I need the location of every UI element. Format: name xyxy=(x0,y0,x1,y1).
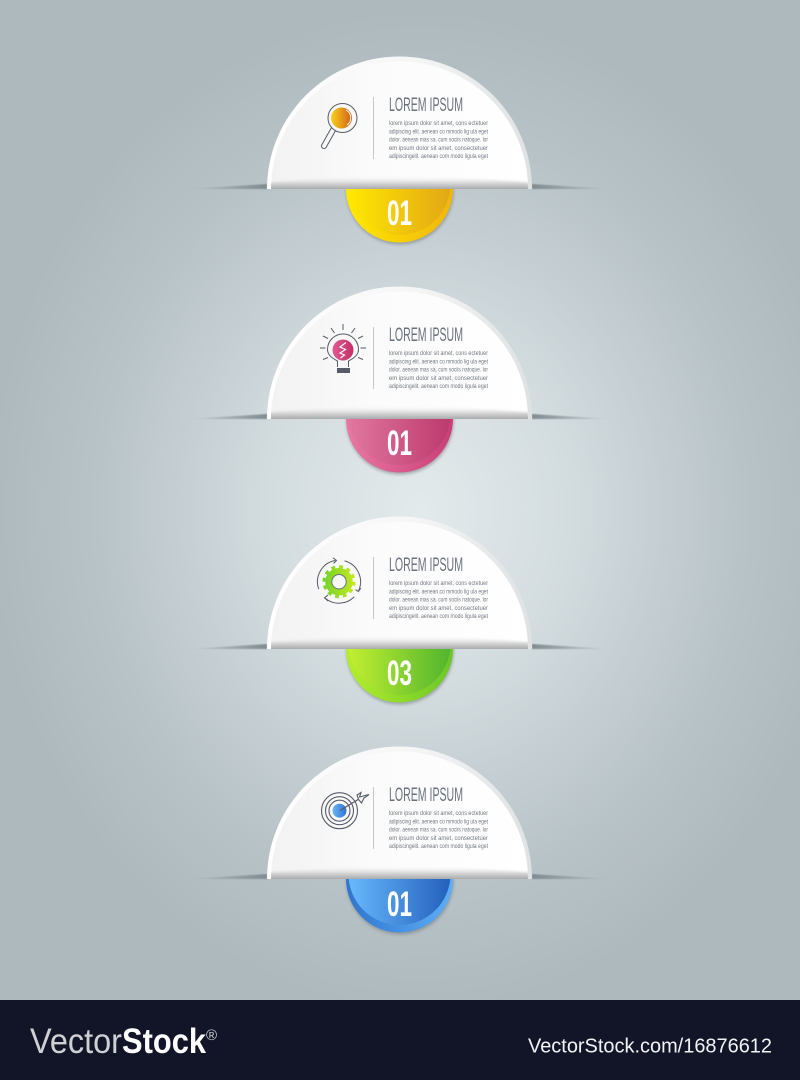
text block xyxy=(389,350,489,390)
semicircle card xyxy=(262,286,537,422)
number badge: 01 xyxy=(345,419,455,476)
text block xyxy=(389,810,489,850)
text block: adipiscingelit. aenean com modo ligula eget xyxy=(389,153,488,160)
icon: light bulb xyxy=(320,324,366,373)
logo: ® xyxy=(206,1027,217,1044)
icon: target with arrow xyxy=(322,792,369,829)
panel: step 1 xyxy=(188,56,610,244)
text block: lorem ipsum dolor sit amet, cons ectetuer xyxy=(389,120,489,127)
logo: Stock xyxy=(122,1022,206,1061)
panel: step 4 xyxy=(188,746,610,934)
text block: dolor. aenean mas sa. cum sociis natoque. lor xyxy=(389,827,489,834)
text block: em ipsum dolor sit amet, consectetuer xyxy=(389,375,489,382)
number badge: 01 xyxy=(345,189,455,246)
divider xyxy=(373,557,374,619)
text block: em ipsum dolor sit amet, consectetuer xyxy=(389,145,489,152)
semicircle card xyxy=(262,56,537,192)
slit shadow xyxy=(188,184,610,189)
text block: lorem ipsum dolor sit amet, cons ectetuer xyxy=(389,350,489,357)
heading: LOREM IPSUM xyxy=(389,95,463,116)
text block: dolor. aenean mas sa. cum sociis natoque. lor xyxy=(389,137,489,144)
slit shadow xyxy=(188,414,610,419)
footer bar xyxy=(0,1000,800,1080)
panel: step 3 xyxy=(188,516,610,704)
slit shadow xyxy=(188,644,610,649)
number badge: 01 xyxy=(345,879,455,936)
number badge: 01: 01 xyxy=(387,424,412,463)
text block: adipiscingelit. aenean com modo ligula eget xyxy=(389,383,488,390)
semicircle card xyxy=(262,746,537,882)
heading: LOREM IPSUM xyxy=(389,785,463,806)
text block: adipiscing elit. aenean co mmodo lig ula eget xyxy=(389,588,488,595)
text block: em ipsum dolor sit amet, consectetuer xyxy=(389,605,489,612)
text block: adipiscing elit. aenean co mmodo lig ula eget xyxy=(389,358,488,365)
heading: LOREM IPSUM xyxy=(389,555,463,576)
text block: em ipsum dolor sit amet, consectetuer xyxy=(389,835,489,842)
text block: lorem ipsum dolor sit amet, cons ectetuer xyxy=(389,810,489,817)
icon: gear with cycle arrows xyxy=(317,558,361,603)
text block: lorem ipsum dolor sit amet, cons ectetuer xyxy=(389,580,489,587)
number badge: 03: 03 xyxy=(387,654,412,693)
text block: dolor. aenean mas sa. cum sociis natoque. lor xyxy=(389,597,489,604)
number badge: 01: 01 xyxy=(387,885,412,924)
text block: adipiscing elit. aenean co mmodo lig ula eget xyxy=(389,128,488,135)
icon: magnifier xyxy=(324,104,357,146)
text block: adipiscing elit. aenean co mmodo lig ula eget xyxy=(389,818,488,825)
number badge: 01: 01 xyxy=(387,194,412,233)
text block: dolor. aenean mas sa. cum sociis natoque. lor xyxy=(389,367,489,374)
semicircle card xyxy=(262,516,537,652)
heading: LOREM IPSUM xyxy=(389,325,463,346)
text block: adipiscingelit. aenean com modo ligula eget xyxy=(389,613,488,620)
panel: step 2 xyxy=(188,286,610,474)
text block xyxy=(389,580,489,620)
number badge: 03 xyxy=(345,649,455,706)
logo xyxy=(30,1022,217,1061)
logo: Vector xyxy=(30,1022,122,1061)
slit shadow xyxy=(188,874,610,879)
text block: adipiscingelit. aenean com modo ligula eget xyxy=(389,843,488,850)
divider xyxy=(373,97,374,159)
divider xyxy=(373,787,374,849)
divider xyxy=(373,327,374,389)
text block xyxy=(389,120,489,160)
image id: VectorStock.com/16876612 xyxy=(528,1036,772,1058)
